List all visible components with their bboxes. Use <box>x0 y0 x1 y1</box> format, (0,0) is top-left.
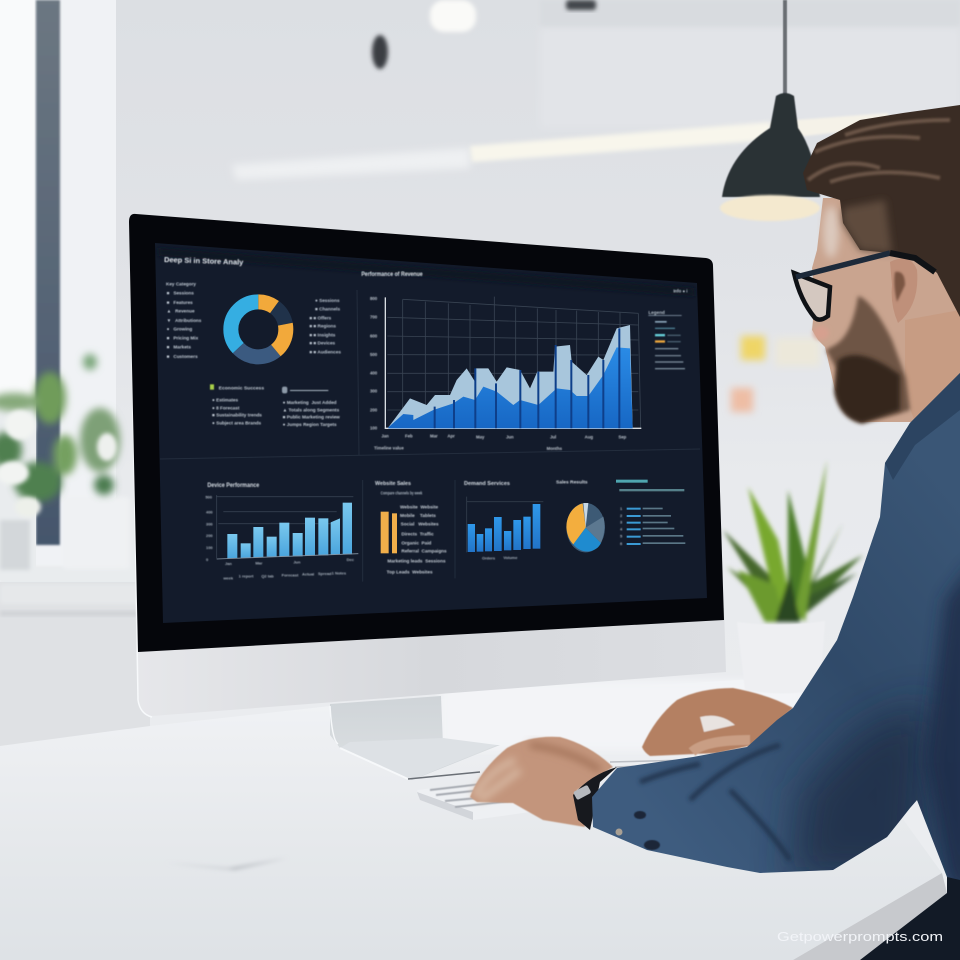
legend: left list: ■ Pricing Mix <box>167 335 199 340</box>
legend: lower list one: Economic Success <box>219 385 264 391</box>
legend: right list: ■ Channels <box>315 307 340 312</box>
ceiling lights and fittings <box>232 0 890 180</box>
axis labels: Sep <box>618 435 627 440</box>
chart legend: Legend <box>648 310 665 315</box>
axis labels: 300 <box>370 389 378 394</box>
legend: left list: ● Growing <box>167 327 192 332</box>
axis labels: week <box>222 575 234 580</box>
heading: dashboard title: Deep Si in Store Analy <box>164 255 244 267</box>
legend: right list: ■ ■ Regions <box>309 323 336 328</box>
legend: right list: ● Sessions <box>315 298 340 303</box>
orange bars <box>381 512 389 553</box>
shirt shadow <box>790 560 960 900</box>
legend: left list: ▲ Revenue <box>167 309 195 314</box>
legend: lower list two: ● Marketing Just Added <box>283 400 337 405</box>
panel: middle orange bars and list <box>375 481 447 575</box>
keyboard <box>417 757 697 820</box>
axis labels: Volume <box>503 555 518 560</box>
legend: lower list one <box>210 384 264 426</box>
axis labels: Jun <box>293 559 301 564</box>
legend: left list: ■ Markets <box>167 345 191 350</box>
panel: lower-left bar chart <box>205 483 358 580</box>
axis labels: Actual <box>302 572 314 577</box>
legend: left list: ▼ Attributions <box>167 318 202 323</box>
hair <box>803 105 960 317</box>
pendant lamp <box>720 0 820 221</box>
cuff buttons <box>634 811 646 819</box>
legend: right list: ■ ■ Audiences <box>309 349 341 354</box>
panel: right list: 3 <box>620 520 623 525</box>
dividers <box>363 480 455 582</box>
desk front edge <box>793 873 947 960</box>
axis labels: Jul <box>550 435 556 440</box>
monitor screen <box>155 243 707 623</box>
plant pot <box>737 621 825 694</box>
sticky notes on the wall <box>731 336 820 412</box>
left shelf and cabinet <box>0 566 150 748</box>
list: Mobile Tablets <box>400 513 436 518</box>
watch <box>573 767 617 830</box>
axis labels: Months <box>547 446 563 451</box>
panel: top-left donut summary <box>164 255 341 427</box>
list: Organic Paid <box>401 540 432 545</box>
axis labels: Spread <box>318 571 332 576</box>
axis labels: Mar <box>430 433 438 438</box>
legend: right list: ■ ■ Insights <box>309 333 336 338</box>
heading: Demand Services <box>464 481 510 487</box>
axis labels: 100 <box>206 545 213 550</box>
legend: lower list one: ■ Sustainability trends <box>212 413 262 418</box>
axis labels: Feb <box>405 433 413 438</box>
list: Referral Campaigns <box>401 548 447 553</box>
axis labels: Forecast <box>282 573 299 578</box>
legend: lower list two: ▲ Totals along Segments <box>283 407 340 412</box>
axis labels: 700 <box>370 315 378 320</box>
axis labels <box>482 555 518 561</box>
axis labels: Aug <box>585 435 593 440</box>
legend: left list: Key Category <box>166 281 196 286</box>
axis labels: 600 <box>370 333 378 338</box>
ear <box>890 258 917 323</box>
axis labels: 200 <box>206 533 213 538</box>
panel: main stacked area chart <box>361 271 687 451</box>
legend: lower list two: ● Jumps Region Targets <box>283 422 337 427</box>
panel: right list <box>616 480 685 546</box>
axis labels: Jan <box>225 561 232 566</box>
dark area dividers <box>435 328 619 428</box>
window on the left <box>0 0 116 600</box>
legend: left list: ■ Customers <box>167 354 198 359</box>
axis labels: 300 <box>206 522 213 527</box>
panel: right list: 1 <box>620 506 623 511</box>
axis labels: 400 <box>370 371 378 376</box>
panel: right list: 4 <box>620 526 623 531</box>
desk <box>0 676 942 960</box>
list <box>387 504 447 575</box>
legend: right list <box>309 298 341 354</box>
legend: left list <box>166 281 202 359</box>
chart legend <box>648 289 687 369</box>
pie slices <box>566 503 605 552</box>
shirt folds <box>640 745 790 860</box>
list: Website Website <box>400 504 439 509</box>
glasses <box>794 253 935 320</box>
legend: right list: ■ ■ Devices <box>309 341 336 346</box>
beard <box>826 296 910 423</box>
legend: lower list one: ● Estimates <box>212 397 239 402</box>
axis labels: 100 <box>370 425 378 430</box>
man <box>470 105 960 960</box>
legend: left list: ■ Features <box>167 300 193 305</box>
axis labels: 0 <box>206 557 209 562</box>
axis labels: 400 <box>206 510 213 515</box>
axis labels: Apr <box>447 433 455 438</box>
watermark: Getpowerprompts.com <box>777 929 943 944</box>
bars <box>227 503 352 558</box>
panel: right list: 2 <box>620 513 623 518</box>
monitor bezel <box>129 214 724 652</box>
grid lines <box>216 495 353 558</box>
heading: Sales Results <box>556 479 588 485</box>
axis labels: 200 <box>370 407 378 412</box>
axis labels: May <box>476 435 485 440</box>
axis labels <box>370 296 627 451</box>
legend: right list: ■ ■ Offers <box>309 315 332 320</box>
axis labels: 1 report <box>239 574 254 579</box>
legend: left list: ■ Sessions <box>167 291 194 296</box>
monitor chin <box>137 608 726 716</box>
panel: lower dashboard row <box>205 479 685 582</box>
list: Top Leads Websites <box>387 570 433 575</box>
heading: Device Performance <box>207 483 260 489</box>
blue lower area <box>388 347 633 428</box>
list: Directs Traffic <box>401 532 434 537</box>
axis labels: 1 Notes <box>332 570 347 575</box>
axis labels: 800 <box>370 296 378 301</box>
monitor stand <box>330 696 500 780</box>
chart axes <box>385 297 641 428</box>
neck and face <box>812 198 960 422</box>
axis labels: Jan <box>381 433 389 438</box>
axis labels: Dec <box>347 557 355 562</box>
list: Social Websites <box>401 522 439 527</box>
chart legend: Info ● i <box>673 289 687 294</box>
axis labels: 500 <box>205 494 213 499</box>
monitor <box>129 214 726 717</box>
subheading: Compare channels by week <box>381 490 423 495</box>
plants on the left shelf <box>0 354 130 570</box>
axis labels: Jun <box>506 435 514 440</box>
pale upper area <box>388 325 633 428</box>
lower hand <box>470 737 613 827</box>
axis labels: Orders <box>482 556 496 561</box>
legend: lower list two <box>282 387 340 427</box>
axis labels: 500 <box>370 352 378 357</box>
heading: Website Sales <box>375 481 411 487</box>
axis labels: Mar <box>255 560 263 565</box>
axis labels: Timeline value <box>374 445 404 450</box>
legend: lower list one: ● 8 Forecast <box>212 405 240 410</box>
shirt <box>592 373 960 900</box>
panel: pie chart <box>556 479 605 552</box>
bars <box>468 504 540 552</box>
panel: right list: 5 <box>620 534 623 539</box>
potted plant on the right <box>723 460 863 694</box>
list: Marketing leads Sessions <box>387 558 446 563</box>
axis labels: Q2 tab <box>261 574 274 579</box>
legend: lower list two: ■ Public Marketing review <box>283 415 340 420</box>
donut chart <box>231 302 286 357</box>
pots <box>0 520 30 570</box>
collar <box>885 373 960 480</box>
chart grid <box>387 297 641 428</box>
foliage <box>0 354 120 502</box>
upper hand <box>642 688 793 756</box>
heading: main chart title: Performance of Revenue <box>361 271 423 278</box>
axis labels <box>205 494 355 580</box>
panel: right list: 6 <box>620 541 623 546</box>
legend: lower list one: ● Subject area Brands <box>212 421 262 426</box>
dark lower right corner <box>860 877 960 960</box>
panel: blue bar chart <box>464 481 543 561</box>
